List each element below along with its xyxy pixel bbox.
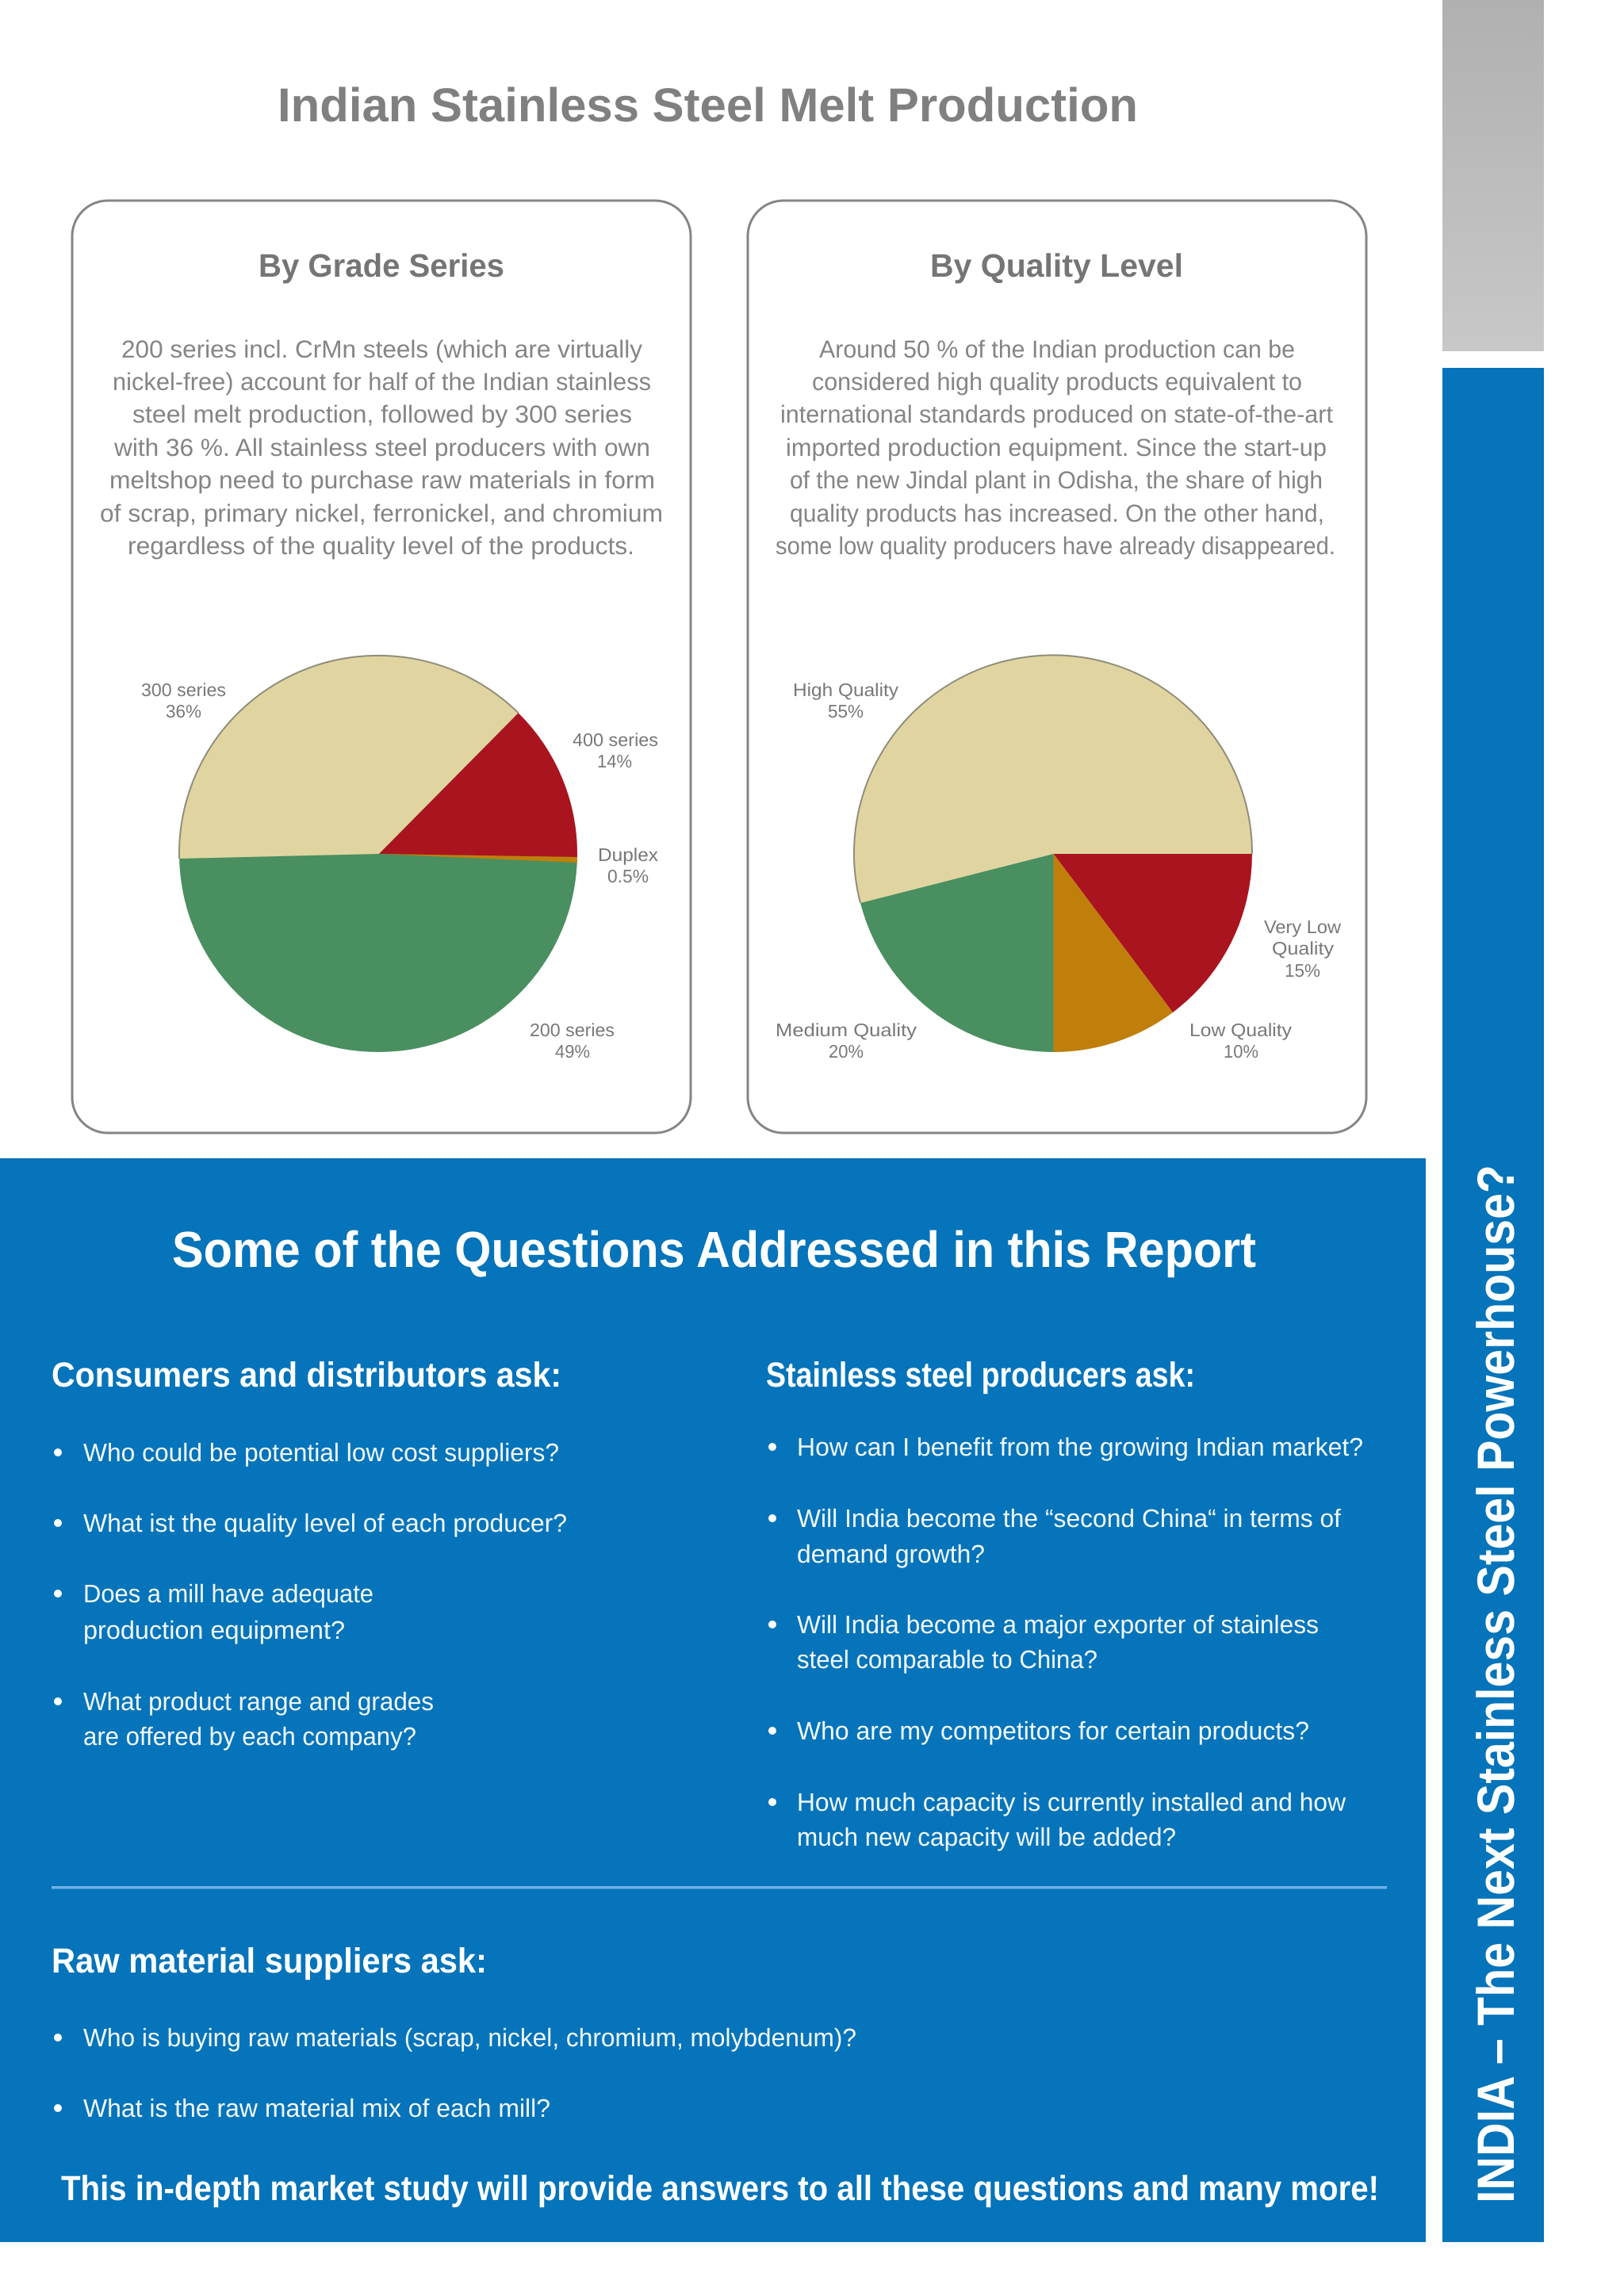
- panel heading: By Quality Level: [930, 247, 1183, 284]
- bullet list: Who could be potential low cost suppliers?: [83, 1438, 559, 1467]
- pie label: very low quality: [1264, 916, 1341, 981]
- pie label: medium quality: [776, 1020, 917, 1062]
- group heading: Stainless steel producers ask:: [766, 1356, 1195, 1395]
- panel: questions addressed: [0, 1158, 1426, 2242]
- bullet list: are offered by each company?: [83, 1722, 416, 1751]
- bullet list: What is the raw material mix of each mill?: [83, 2094, 550, 2122]
- text block: of the new Jindal plant in Odisha, the share of high: [790, 466, 1323, 494]
- pie label: very low quality: 15%: [1285, 960, 1320, 981]
- sidebar title: INDIA – The Next Stainless Steel Powerhouse?: [1466, 1165, 1525, 2203]
- panel frame: [748, 201, 1366, 1133]
- group: consumers and distributors: [52, 1356, 567, 1751]
- group: raw material suppliers: [52, 1942, 856, 2122]
- title: Indian Stainless Steel Melt Production: [278, 78, 1138, 132]
- bullet list: steel comparable to China?: [797, 1645, 1097, 1674]
- group heading: Raw material suppliers ask:: [52, 1942, 487, 1980]
- bullet list: What product range and grades: [83, 1687, 434, 1716]
- pie label: duplex: 0.5%: [607, 866, 649, 886]
- pie chart: grade series: [179, 656, 577, 1052]
- blue background: [0, 1158, 1426, 2242]
- pie label: 300 series: [141, 679, 226, 721]
- text block: of scrap, primary nickel, ferronickel, and chromium: [100, 499, 663, 527]
- pie label: 200 series: 49%: [555, 1041, 590, 1062]
- pie label: 400 series: 400 series: [573, 729, 658, 750]
- text block: quality products has increased. On the other hand,: [790, 499, 1324, 527]
- pie label: 200 series: [530, 1020, 615, 1062]
- text block: considered high quality products equivalent to: [812, 368, 1302, 396]
- bullet list: Who is buying raw materials (scrap, nickel, chromium, molybdenum)?: [83, 2023, 856, 2052]
- bullet list: Who are my competitors for certain products?: [797, 1716, 1309, 1745]
- text block: regardless of the quality level of the products.: [128, 532, 634, 560]
- panel frame: [72, 201, 691, 1133]
- panel: by grade series: [72, 201, 691, 1133]
- text block: with 36 %. All stainless steel producers with own: [113, 434, 650, 461]
- bullet list: much new capacity will be added?: [797, 1823, 1176, 1851]
- bullet list: Does a mill have adequate: [83, 1579, 373, 1608]
- bullet list: [54, 2023, 856, 2122]
- group: stainless steel producers: [766, 1356, 1363, 1851]
- sidebar: grey block: [1442, 0, 1544, 351]
- bullet list: Will India become a major exporter of stainless: [797, 1610, 1319, 1639]
- text block: nickel-free) account for half of the Indian stainless: [113, 368, 651, 396]
- pie label: 400 series: 14%: [597, 751, 632, 771]
- bullet list: How much capacity is currently installed and how: [797, 1788, 1346, 1816]
- text block: international standards produced on state-of-the-art: [780, 400, 1333, 428]
- bullet list: [54, 1438, 567, 1751]
- text block: Around 50 % of the Indian production can be: [819, 335, 1295, 363]
- bullet list: Will India become the “second China“ in terms of: [797, 1504, 1341, 1533]
- pie label: medium quality: 20%: [829, 1041, 864, 1062]
- pie chart: quality level: [854, 655, 1252, 1052]
- text block: some low quality producers have already disappeared.: [776, 532, 1335, 560]
- sidebar: blue title bar: [1442, 368, 1544, 2242]
- pie label: high quality: [793, 679, 899, 721]
- bullet list: [768, 1433, 1363, 1851]
- pie label: very low quality: Quality: [1272, 938, 1335, 959]
- pie label: high quality: 55%: [828, 701, 864, 721]
- text block: steel melt production, followed by 300 series: [132, 400, 632, 428]
- section heading: Some of the Questions Addressed in this Report: [172, 1221, 1256, 1278]
- text block: imported production equipment. Since the start-up: [786, 434, 1327, 461]
- pie label: medium quality: Medium Quality: [776, 1020, 917, 1040]
- pie label: duplex: [598, 844, 659, 886]
- bullet list: demand growth?: [797, 1540, 985, 1568]
- panel: by quality level: [748, 201, 1366, 1133]
- text block: [776, 335, 1335, 560]
- bullet list: How can I benefit from the growing Indian market?: [797, 1433, 1363, 1461]
- pie label: 200 series: 200 series: [530, 1020, 615, 1040]
- pie label: high quality: High Quality: [793, 679, 899, 700]
- closing statement: This in-depth market study will provide answers to all these questions and many more!: [61, 2169, 1379, 2208]
- pie label: low quality: Low Quality: [1189, 1020, 1293, 1040]
- text block: 200 series incl. CrMn steels (which are virtually: [121, 335, 642, 363]
- bullet list: What ist the quality level of each producer?: [83, 1509, 567, 1537]
- pie label: low quality: [1189, 1020, 1293, 1062]
- pie label: 400 series: [573, 729, 658, 771]
- group heading: Consumers and distributors ask:: [52, 1356, 561, 1395]
- text block: meltshop need to purchase raw materials in form: [109, 466, 655, 494]
- pie label: 300 series: 36%: [166, 701, 201, 721]
- pie label: low quality: 10%: [1224, 1041, 1258, 1062]
- pie label: duplex: Duplex: [598, 844, 659, 865]
- bullet list: production equipment?: [83, 1616, 345, 1644]
- text block: [100, 335, 663, 560]
- pie label: very low quality: Very Low: [1264, 916, 1341, 937]
- panel heading: By Grade Series: [259, 247, 504, 284]
- pie label: 300 series: 300 series: [141, 679, 226, 700]
